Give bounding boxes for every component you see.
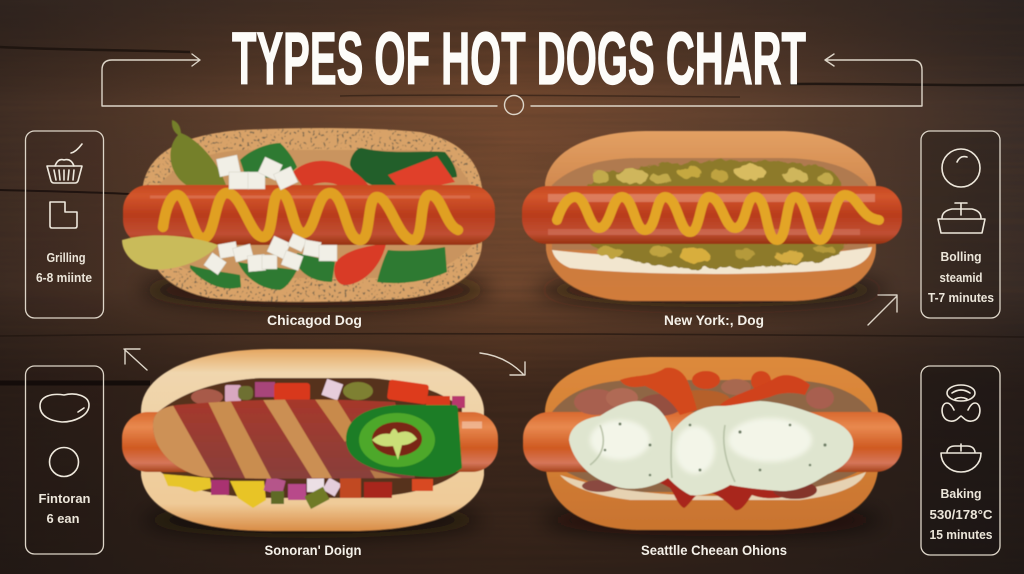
- label: New York: New York:, Dog: [664, 312, 764, 328]
- hot dog: Chicago: [122, 120, 495, 312]
- text: grilling time: [36, 251, 92, 285]
- text: baking time: 530/178°C: [930, 508, 992, 522]
- icon: bowl: [941, 444, 981, 472]
- cream cheese: [569, 401, 853, 495]
- pickle spear: [170, 120, 227, 188]
- sauerkraut: [585, 160, 848, 268]
- text: frying time: [38, 492, 90, 526]
- bun: [545, 357, 878, 530]
- text: baking time: [930, 487, 993, 542]
- text: grilling time: Grilling: [46, 251, 86, 265]
- text: frying time: Fintoran: [38, 492, 90, 506]
- hot dog: Seattle: [523, 357, 902, 536]
- mustard zigzag: [163, 193, 458, 240]
- icon: burner: [942, 385, 980, 421]
- icon: folder: [50, 202, 77, 228]
- icon: circle: [50, 448, 78, 476]
- label: Sonoran: Sonoran' Doign: [264, 542, 362, 558]
- text: baking time: Baking: [940, 487, 982, 501]
- label: Seattle: Seattlle Cheean Ohions: [641, 542, 787, 558]
- bun: [141, 349, 484, 531]
- hot dog: New York: [522, 131, 902, 310]
- icon: potato: [40, 394, 89, 422]
- arrow: curved down right: [480, 353, 525, 375]
- icon: basket: [47, 144, 82, 183]
- text: boiling time: T-7 minutes: [928, 291, 994, 305]
- text: boiling time: steamid: [940, 271, 982, 285]
- sausage: [122, 412, 498, 472]
- sausage: [522, 186, 902, 244]
- panel: frying: [26, 366, 104, 554]
- text: grilling time: 6-8 miinte: [36, 271, 92, 285]
- bun: [545, 131, 876, 301]
- sausage: [123, 185, 495, 245]
- jalapeno slice: [346, 405, 462, 477]
- text: boiling time: Bolling: [940, 250, 982, 264]
- lettuce: [190, 143, 457, 290]
- mustard zigzag: [557, 195, 879, 240]
- tomato slices: [293, 156, 455, 285]
- bacon wrap: [152, 398, 416, 480]
- icon: clock dial: [942, 149, 980, 187]
- arrow: up right: [868, 295, 897, 325]
- arrow: up left: [124, 349, 147, 370]
- text: frying time: 6 ean: [46, 512, 80, 526]
- pickle slice: [122, 235, 218, 270]
- panel: boiling: [921, 131, 1000, 318]
- sausage: [523, 412, 902, 472]
- title frame with arrows: [102, 54, 922, 114]
- icon: steamer pot: [938, 203, 985, 233]
- text: boiling time: [928, 250, 994, 305]
- panel: grilling: [26, 131, 104, 318]
- hot dog: Sonoran: [122, 349, 498, 538]
- text: baking time: 15 minutes: [930, 528, 993, 542]
- relish and onions: [163, 379, 465, 509]
- meat pieces and chili: [574, 368, 834, 510]
- onion pieces: [204, 155, 337, 275]
- label: Chicago: Chicagod Dog: [267, 312, 362, 328]
- poppy seed bun: [143, 128, 482, 302]
- panel: baking: [921, 366, 1000, 555]
